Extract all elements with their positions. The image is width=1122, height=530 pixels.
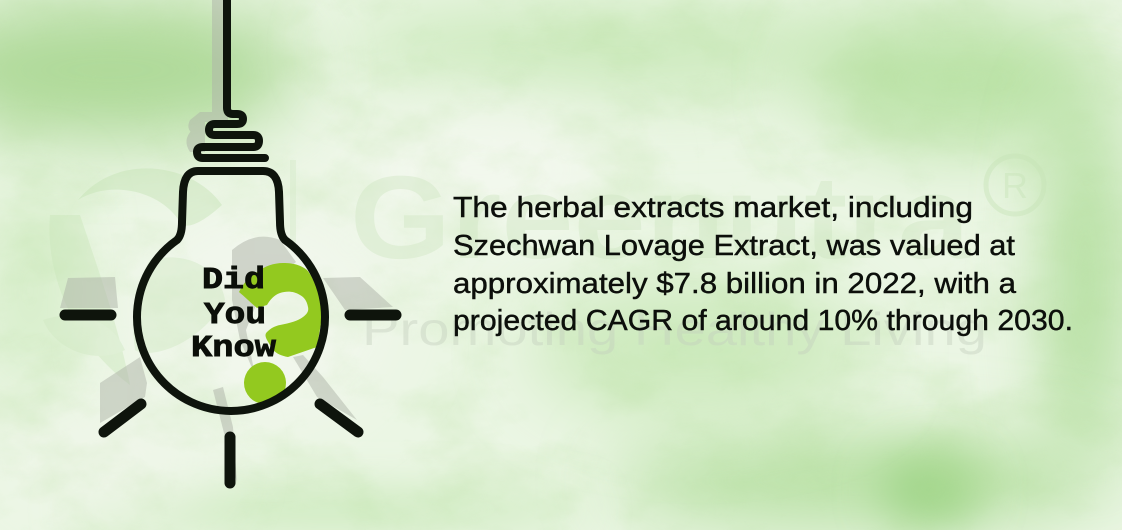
question mark [239, 263, 322, 404]
did you know heading [191, 263, 276, 366]
market statistic text: Szechwan Lovage Extract, was valued at [453, 230, 1015, 262]
bulb glass [137, 171, 325, 411]
did you know heading: You [204, 298, 266, 333]
did you know heading: Did [202, 263, 265, 298]
watermark logo: R [1002, 165, 1028, 206]
watermark logo: Promoting Healthy Living [362, 303, 987, 355]
did you know heading: Know [191, 331, 276, 366]
cord and coil [197, 0, 265, 158]
market statistic text: The herbal extracts market, including [453, 192, 973, 224]
watermark logo [43, 152, 1044, 385]
light rays [65, 315, 396, 483]
market statistic text: approximately $7.8 billion in 2022, with a [453, 268, 1017, 300]
watermark logo: Greenutra [350, 152, 971, 284]
bulb shadow [60, 0, 393, 483]
light bulb outline [137, 0, 325, 411]
market statistic text: projected CAGR of around 10% through 2030. [453, 305, 1073, 337]
market statistic text [453, 192, 1073, 337]
